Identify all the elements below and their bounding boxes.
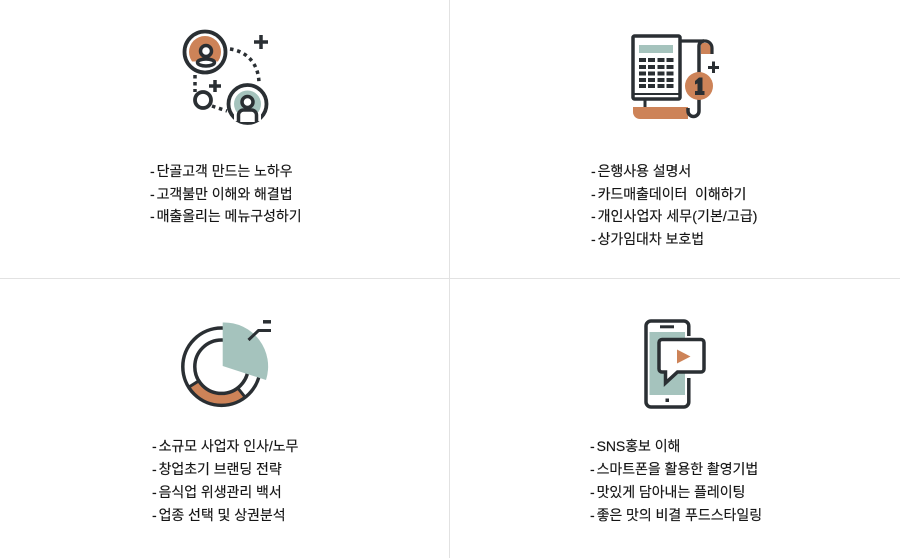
text block: top left list: - 단골고객 만드는 노하우 <box>150 163 293 179</box>
text block: bottom left list <box>152 438 298 523</box>
text block: bottom right list: - 좋은 맛의 비결 푸드스타일링 <box>590 507 762 523</box>
text block: top left list: - 매출올리는 메뉴구성하기 <box>150 208 302 224</box>
text block: bottom right list: - SNS홍보 이해 <box>590 438 680 454</box>
text block: top right list: - 개인사업자 세무(기본/고급) <box>591 208 758 224</box>
text block: top right list: - 카드매출데이터 이해하기 <box>591 186 746 202</box>
text block: bottom left list: - 음식업 위생관리 백서 <box>152 484 282 500</box>
text block: bottom left list: - 소규모 사업자 인사/노무 <box>152 438 298 454</box>
text block: bottom right list <box>590 438 762 523</box>
text block: bottom right list: - 맛있게 담아내는 플레이팅 <box>590 484 745 500</box>
text block: top right list <box>591 163 758 247</box>
text block: top right list: - 상가임대차 보호법 <box>591 231 704 247</box>
text block: bottom left list: - 창업초기 브랜딩 전략 <box>152 461 282 477</box>
text block: top left list <box>150 163 302 224</box>
text block: bottom right list: - 스마트폰을 활용한 촬영기법 <box>590 461 758 477</box>
text block: top left list: - 고객불만 이해와 해결법 <box>150 186 293 202</box>
text block: bottom left list: - 업종 선택 및 상권분석 <box>152 507 286 523</box>
text block: top right list: - 은행사용 설명서 <box>591 163 691 179</box>
